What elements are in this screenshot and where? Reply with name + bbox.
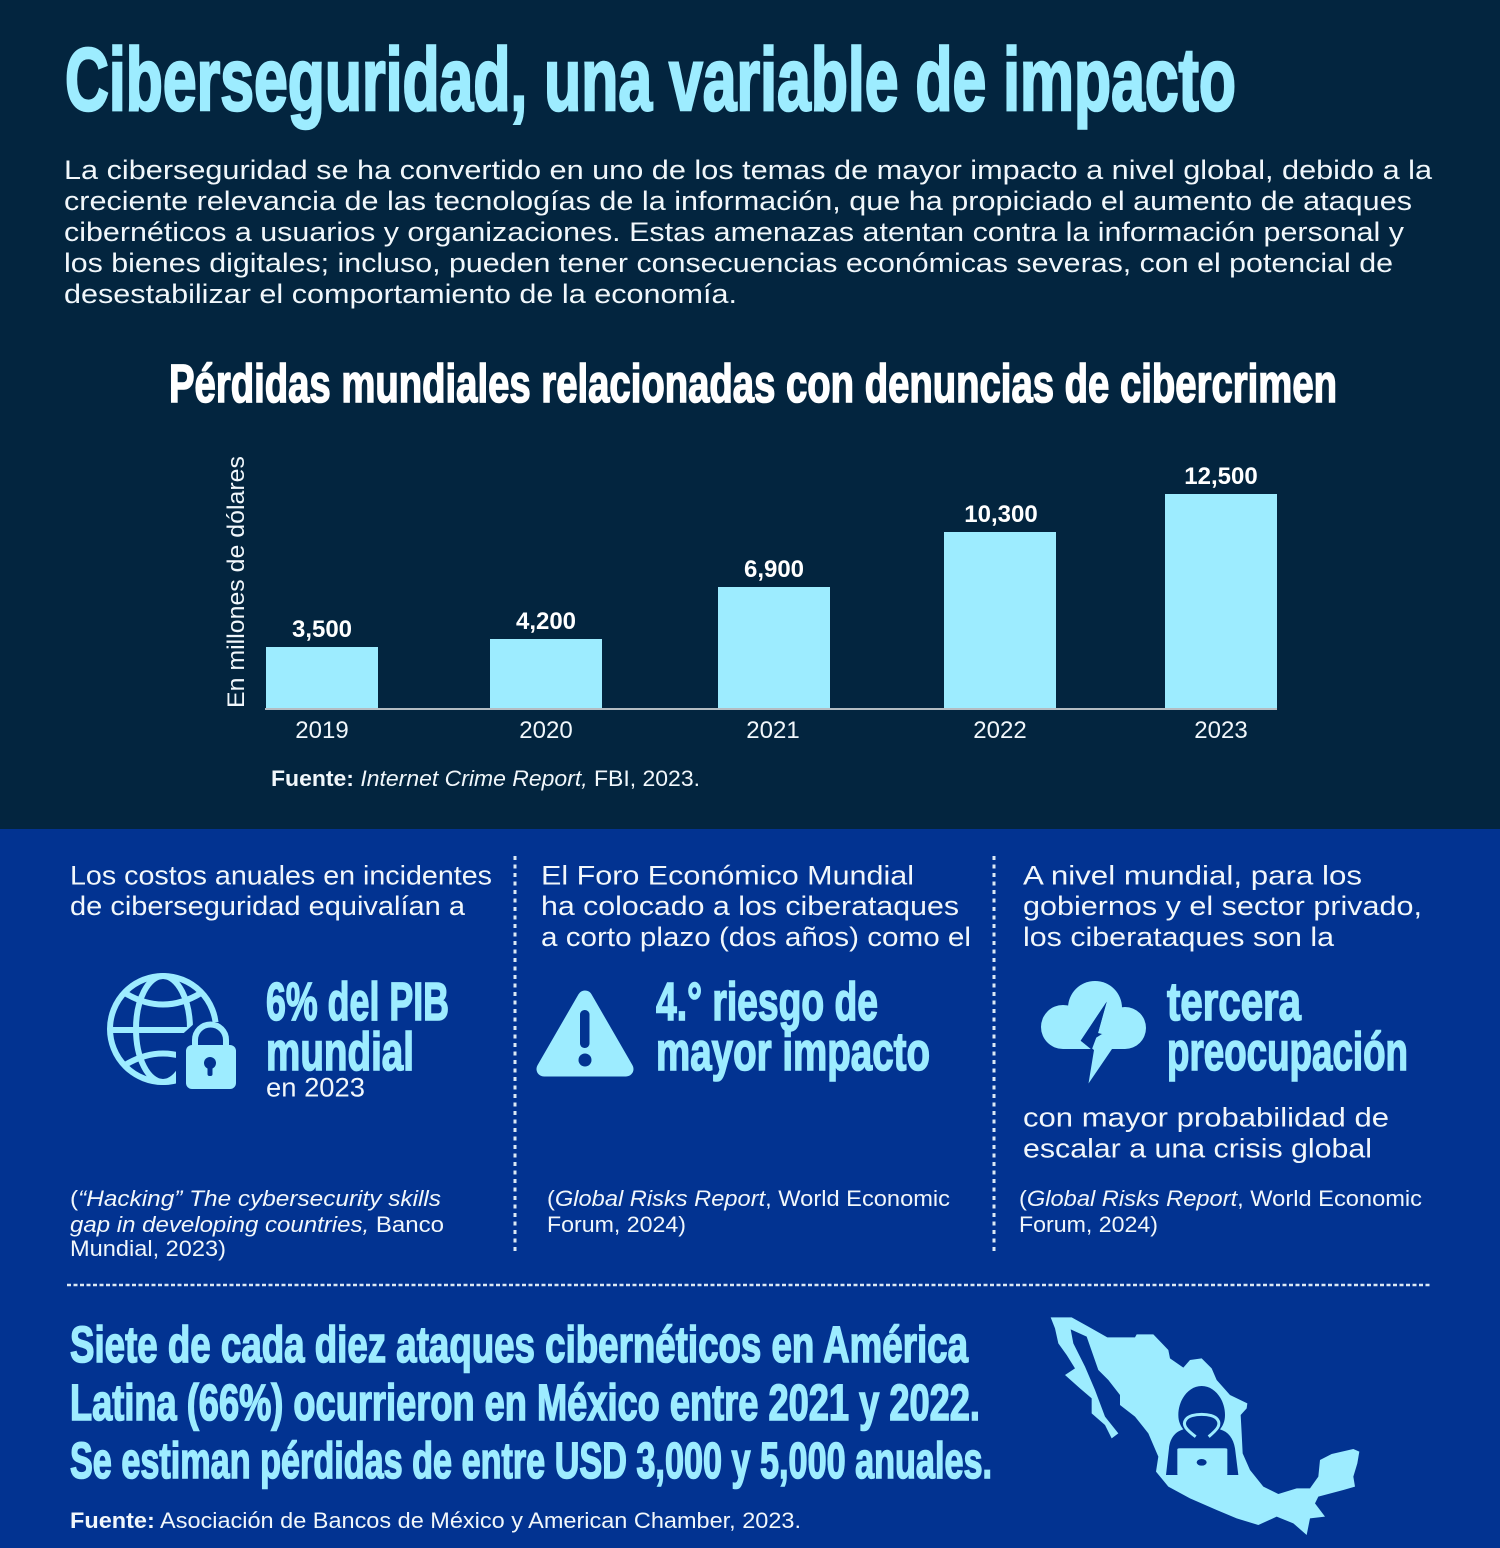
panel: top dark background (0, 0, 1500, 829)
source (547, 1186, 950, 1237)
intro paragraph: creciente relevancia de las tecnologías de la información, que ha propiciado el aumento de ataques (64, 186, 1412, 216)
big stat (266, 972, 449, 1102)
source: Forum, 2024) (547, 1212, 686, 1237)
icon: globe with padlock (110, 976, 250, 1096)
panel: column 3 (1019, 860, 1422, 1237)
big stat (1167, 972, 1408, 1082)
big stat: en 2023 (266, 1072, 365, 1102)
panel: bottom blue background (0, 829, 1500, 1548)
bar 2020: 4,200 (516, 608, 576, 635)
bar 2022: 2022 (973, 717, 1027, 744)
intro text (1023, 860, 1422, 952)
bar 2023 (1165, 463, 1277, 744)
chart source: Fuente: Internet Crime Report, FBI, 2023. (271, 766, 700, 791)
source (1019, 1186, 1422, 1237)
big stat: 6% del PIB (266, 972, 449, 1032)
bar 2019 (266, 616, 378, 744)
bar 2023: 2023 (1194, 717, 1248, 744)
bar 2022: 10,300 (964, 501, 1038, 528)
bar chart (223, 456, 1277, 744)
intro paragraph (64, 155, 1433, 309)
intro paragraph: cibernéticos a usuarios y organizaciones. Estas amenazas atentan contra la información personal y (64, 217, 1405, 247)
intro text: gobiernos y el sector privado, (1023, 891, 1422, 921)
closing text: escalar a una crisis global (1023, 1134, 1372, 1164)
panel: column 2 (541, 860, 971, 1237)
source: Mundial, 2023) (70, 1236, 226, 1261)
icon: warning triangle (544, 998, 626, 1069)
big stat: mundial (266, 1022, 414, 1082)
intro text: a corto plazo (dos años) como el (541, 922, 971, 952)
bottom statement (70, 1316, 992, 1489)
intro text: A nivel mundial, para los (1023, 860, 1362, 890)
bottom statement: Se estiman pérdidas de entre USD 3,000 y 5,000 anuales. (70, 1432, 992, 1489)
map of Mexico (1051, 1317, 1359, 1535)
bar 2019: 2019 (295, 717, 349, 744)
source: (Global Risks Report , World Economic (1019, 1186, 1422, 1211)
y axis label: En millones de dólares (223, 456, 250, 708)
bottom statement: Latina (66%) ocurrieron en México entre 2021 y 2022. (70, 1374, 980, 1431)
intro text: ha colocado a los ciberataques (541, 891, 959, 921)
hacker figure (1166, 1386, 1238, 1475)
source: gap in developing countries, Banco (70, 1212, 444, 1237)
intro text: de ciberseguridad equivalían a (70, 891, 466, 921)
source (70, 1186, 444, 1261)
bar 2020: 2020 (519, 717, 573, 744)
intro text: El Foro Económico Mundial (541, 860, 914, 890)
icon: map of Mexico with hacker (1051, 1317, 1359, 1535)
bar 2023: 12,500 (1184, 463, 1258, 490)
source: Forum, 2024) (1019, 1212, 1158, 1237)
big stat: tercera (1167, 972, 1302, 1032)
intro text (541, 860, 971, 952)
bar 2019: 3,500 (292, 616, 352, 643)
intro paragraph: los bienes digitales; incluso, pueden tener consecuencias económicas severas, con el potencial de (64, 248, 1393, 278)
big stat: mayor impacto (656, 1022, 930, 1082)
x axis (265, 708, 1277, 710)
intro text (70, 860, 492, 921)
bottom statement: Siete de cada diez ataques cibernéticos en América (70, 1316, 968, 1373)
bar 2021: 6,900 (744, 556, 804, 583)
closing text (1023, 1102, 1389, 1164)
icon: storm cloud (1041, 981, 1146, 1084)
intro text: los ciberataques son la (1023, 922, 1335, 952)
panel: column 1 (70, 860, 492, 1261)
bar 2020 (490, 608, 602, 744)
bar 2022 (944, 501, 1056, 744)
source: (Global Risks Report , World Economic (547, 1186, 950, 1211)
bottom source: Fuente: Asociación de Bancos de México y American Chamber, 2023. (70, 1508, 801, 1533)
big stat (656, 972, 930, 1082)
column dividers (515, 856, 994, 1252)
intro text: Los costos anuales en incidentes (70, 860, 492, 890)
intro paragraph: La ciberseguridad se ha convertido en uno de los temas de mayor impacto a nivel global, debido a la (64, 155, 1433, 185)
bar 2021 (718, 556, 830, 744)
closing text: con mayor probabilidad de (1023, 1102, 1389, 1132)
source: (“Hacking” The cybersecurity skills (70, 1186, 441, 1211)
big stat: 4.° riesgo de (656, 972, 878, 1032)
intro paragraph: desestabilizar el comportamiento de la economía. (64, 279, 737, 309)
bar 2021: 2021 (746, 717, 800, 744)
